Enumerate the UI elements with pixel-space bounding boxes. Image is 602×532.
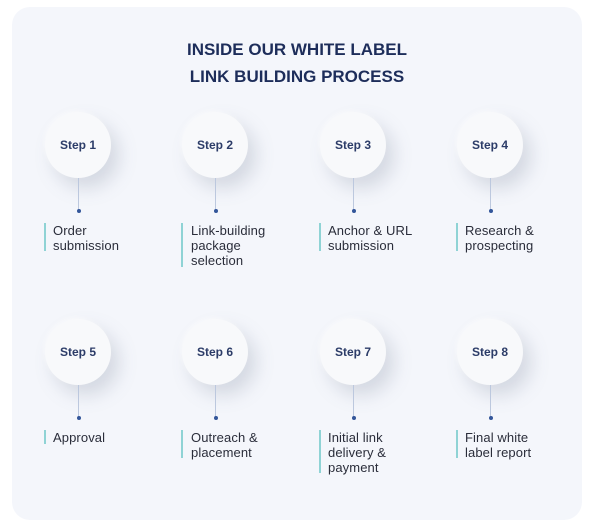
step 2: Step 2 bbox=[197, 138, 233, 152]
step 1: submission bbox=[53, 238, 119, 253]
step 3 bbox=[319, 122, 412, 253]
step 2 bbox=[181, 122, 265, 268]
step 2: package bbox=[191, 238, 241, 253]
step 6: Outreach & bbox=[191, 430, 258, 445]
step 4 bbox=[456, 122, 536, 253]
step 2: selection bbox=[191, 253, 243, 268]
step 1: Step 1 bbox=[60, 138, 96, 152]
step 4: prospecting bbox=[465, 238, 533, 253]
title: INSIDE OUR WHITE LABEL bbox=[187, 40, 407, 59]
step 4: Research & bbox=[465, 223, 534, 238]
step 3: submission bbox=[328, 238, 394, 253]
step 7 bbox=[319, 329, 399, 475]
step 5: Approval bbox=[53, 430, 105, 445]
step 8: Step 8 bbox=[472, 345, 508, 359]
step 5 bbox=[44, 329, 124, 445]
step 7: Initial link bbox=[328, 430, 383, 445]
step 8: label report bbox=[465, 445, 531, 460]
step 1 bbox=[44, 122, 124, 253]
step 6 bbox=[181, 329, 261, 460]
step 7: delivery & bbox=[328, 445, 386, 460]
step 8: Final white bbox=[465, 430, 528, 445]
step 6: Step 6 bbox=[197, 345, 233, 359]
step 4: Step 4 bbox=[472, 138, 508, 152]
title: LINK BUILDING PROCESS bbox=[190, 67, 404, 86]
step 5: Step 5 bbox=[60, 345, 96, 359]
step 3: Anchor & URL bbox=[328, 223, 412, 238]
step 8 bbox=[456, 329, 536, 460]
step 7: Step 7 bbox=[335, 345, 371, 359]
step 1: Order bbox=[53, 223, 87, 238]
step 7: payment bbox=[328, 460, 379, 475]
title bbox=[187, 40, 407, 86]
step 2: Link-building bbox=[191, 223, 265, 238]
step 3: Step 3 bbox=[335, 138, 371, 152]
step 6: placement bbox=[191, 445, 252, 460]
